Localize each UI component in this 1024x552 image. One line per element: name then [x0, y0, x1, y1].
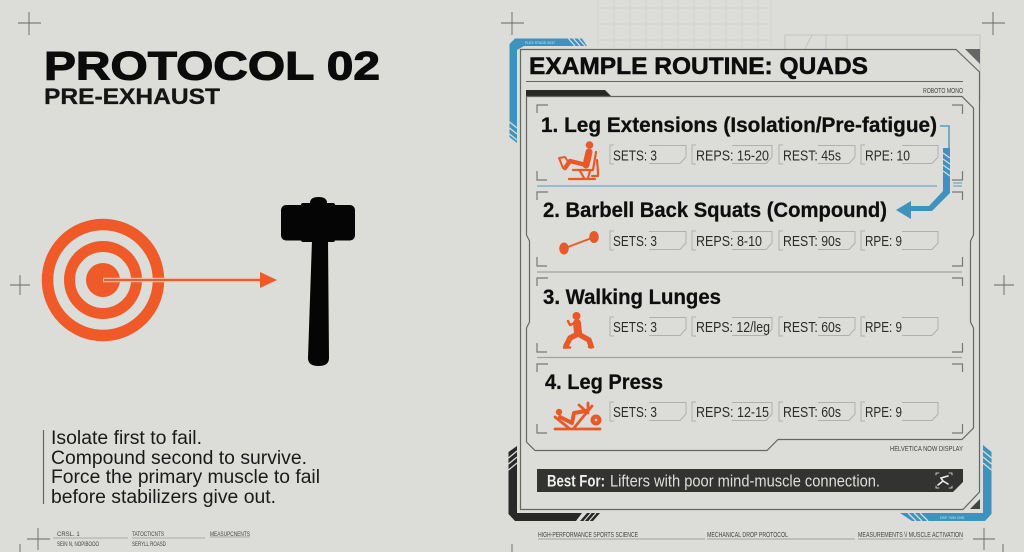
title: PROTOCOL 02	[44, 44, 380, 88]
icon: target with arrow	[48, 224, 277, 336]
left footer microtext: SEIN N, NOPIBOOO	[57, 542, 99, 548]
panel: inner exercises frame	[526, 96, 974, 450]
right footer labels	[538, 530, 963, 539]
exercise 4: leg press: 4. Leg Press	[545, 371, 663, 394]
blue bottom-right bracket	[900, 445, 992, 521]
exercise 1: leg extensions	[537, 105, 962, 180]
exercise 1: leg extensions: SETS: 3	[613, 148, 657, 164]
left footer microtext: SERYLL ROASD	[132, 542, 166, 548]
text block: protocol description: before stabilizers give out.	[51, 487, 276, 508]
icon: leg extension machine	[559, 141, 598, 179]
right footer labels: MEASUREMENTS \/ MUSCLE ACTIVATION	[858, 530, 963, 539]
icon: sledgehammer	[281, 197, 355, 366]
exercise 4: leg press	[537, 364, 962, 433]
exercise 2: barbell back squats: RPE: 9	[865, 234, 902, 250]
exercise 2: barbell back squats: REPS: 8-10	[696, 234, 762, 250]
icon: lunging figure	[564, 312, 593, 348]
exercise 4: leg press: REPS: 12-15	[696, 405, 769, 421]
text block: protocol description: Compound second to survive.	[51, 448, 307, 469]
exercise 1: leg extensions: REPS: 15-20	[696, 148, 769, 164]
exercise 3: walking lunges: 3. Walking Lunges	[543, 286, 721, 309]
left footer microtext: TATOCTICNTS	[132, 532, 164, 538]
bottom-right corner triangle	[970, 499, 980, 509]
exercise 2: barbell back squats: 2. Barbell Back Squats (Compound)	[543, 199, 887, 222]
blue bottom-right bracket: DSP 7490 CNS	[940, 516, 965, 520]
left footer microtext	[53, 532, 250, 548]
font label microtext: HELVETICA NOW DISPLAY	[890, 444, 963, 453]
routine heading: ROBOTO MONO	[923, 86, 963, 95]
exercise 4: leg press: RPE: 9	[865, 405, 902, 421]
exercise 1: leg extensions: 1. Leg Extensions (Isolation/Pre-fatigue)	[541, 114, 937, 137]
exercise 4: leg press: SETS: 3	[613, 405, 657, 421]
exercise 2: barbell back squats	[537, 192, 962, 266]
text block: protocol description	[44, 428, 320, 508]
blue top-left bracket: FLEX STAGE 0037	[525, 41, 555, 45]
icon: runner	[936, 473, 952, 488]
left footer microtext: MEASUPCNENTS	[210, 532, 250, 538]
exercise 3: walking lunges	[537, 278, 962, 352]
exercise 3: walking lunges: RPE: 9	[865, 320, 902, 336]
exercise 3: walking lunges: REPS: 12/leg	[696, 320, 770, 336]
text block: protocol description: Force the primary muscle to fail	[51, 467, 320, 488]
exercise 1: leg extensions: REST: 45s	[783, 148, 841, 164]
grey divider	[537, 356, 962, 358]
exercise 3: walking lunges: SETS: 3	[613, 320, 657, 336]
left footer microtext: CRSL. 1	[57, 532, 80, 538]
arrow: isolation to compound	[896, 126, 950, 219]
exercise 2: barbell back squats: REST: 90s	[783, 234, 841, 250]
top-right corner triangle	[965, 49, 980, 64]
right footer labels: HIGH-PERFORMANCE SPORTS SCIENCE	[538, 530, 638, 539]
exercise 3: walking lunges: REST: 60s	[783, 320, 841, 336]
callout: best for	[537, 469, 963, 492]
icon: leg press machine	[555, 403, 602, 429]
callout: best for: Best For:	[547, 472, 605, 490]
subtitle: PRE-EXHAUST	[44, 84, 220, 109]
routine heading: EXAMPLE ROUTINE: QUADS	[529, 53, 868, 80]
grey divider	[537, 271, 962, 273]
callout: best for: Lifters with poor mind-muscle connection.	[610, 472, 880, 490]
panel: outer routine frame	[520, 50, 980, 510]
black bottom-left bracket	[508, 446, 600, 521]
blue top-left bracket	[510, 38, 587, 143]
right footer labels: MECHANICAL DROP PROTOCOL	[707, 530, 788, 539]
exercise 4: leg press: REST: 60s	[783, 405, 841, 421]
exercise 1: leg extensions: RPE: 10	[865, 148, 910, 164]
background blueprint grid	[598, 0, 980, 100]
text block: protocol description: Isolate first to fail.	[51, 428, 202, 449]
exercise 2: barbell back squats: SETS: 3	[613, 234, 657, 250]
blue divider	[537, 183, 962, 186]
icon: barbell	[559, 231, 599, 254]
routine heading	[526, 53, 963, 96]
